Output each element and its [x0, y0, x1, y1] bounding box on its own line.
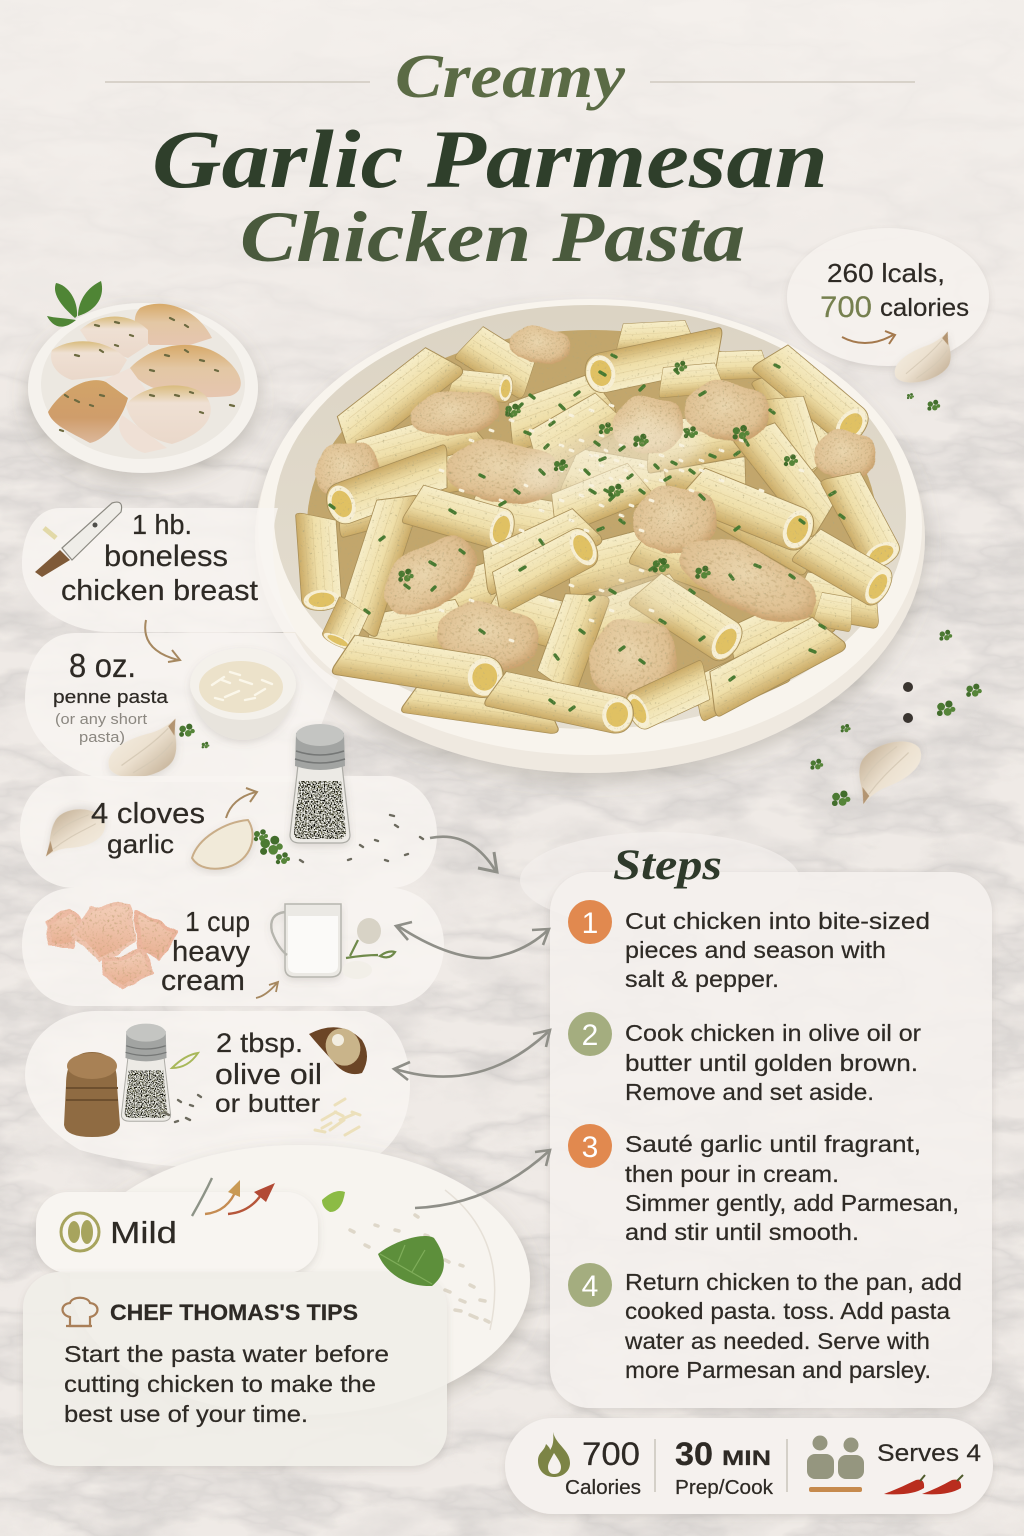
stats bar: Serves 4	[877, 1440, 981, 1467]
pasta and chicken	[295, 320, 904, 736]
stats bar: 30	[675, 1436, 713, 1472]
calorie bubble: 700	[820, 291, 872, 324]
parsley bunch	[254, 829, 290, 864]
icon: garlic and herbs	[342, 918, 395, 979]
bowl	[255, 299, 925, 773]
ingredient: heavy cream: cream	[161, 965, 245, 997]
ingredient: penne pasta: pasta)	[79, 729, 125, 746]
icon: basil	[47, 281, 102, 327]
spice level pill: Mild	[110, 1215, 177, 1250]
ingredient: garlic	[20, 724, 437, 888]
ingredient: penne pasta: (or any short	[55, 711, 148, 728]
ingredient: chicken breast: 1 hb.	[132, 509, 192, 540]
chef tips panel: CHEF THOMAS'S TIPS	[110, 1300, 358, 1325]
ingredient: heavy cream: 1 cup	[185, 906, 250, 937]
step 1: salt & pepper.	[625, 966, 779, 992]
calorie bubble	[787, 228, 989, 386]
ingredient: chicken breast: chicken breast	[61, 575, 258, 607]
step 4: more Parmesan and parsley.	[625, 1357, 931, 1383]
icon: raw chicken	[46, 904, 176, 986]
ingredient: olive oil	[25, 1011, 410, 1169]
icon: spice arrows	[192, 1178, 275, 1216]
ingredient: penne pasta: penne pasta	[53, 687, 169, 707]
chef tips panel	[23, 1272, 447, 1466]
ingredient: olive oil: or butter	[215, 1090, 320, 1118]
step 4: cooked pasta. toss. Add pasta	[625, 1298, 951, 1324]
step 3: Simmer gently, add Parmesan,	[625, 1190, 959, 1216]
calorie bubble: calories	[880, 294, 969, 322]
ingredient: chicken breast	[22, 502, 296, 632]
icon: chef hat	[62, 1298, 98, 1326]
serving plate	[70, 1145, 530, 1415]
icon: chili peppers	[884, 1475, 963, 1494]
stats bar	[505, 1418, 993, 1514]
title: Creamy	[395, 43, 626, 111]
step 4: water as needed. Serve with	[624, 1328, 930, 1354]
icon: wooden shaker	[64, 1052, 120, 1137]
arrow	[256, 982, 278, 998]
arrow	[145, 620, 180, 662]
stats bar: Calories	[565, 1477, 641, 1499]
parmesan sprinkle	[510, 409, 710, 511]
title: Garlic Parmesan	[152, 113, 828, 205]
stats bar: Prep/Cook	[675, 1477, 774, 1499]
title	[105, 43, 915, 277]
scattered garnish	[810, 393, 982, 806]
step 4: 4	[582, 1270, 598, 1303]
title: Chicken Pasta	[240, 197, 745, 277]
ingredient: heavy cream	[22, 888, 444, 1006]
icon: garlic clove	[106, 719, 179, 779]
step 1: pieces and season with	[625, 937, 886, 963]
step 3: 3	[582, 1131, 598, 1164]
stats bar: 700	[582, 1436, 640, 1472]
icon: parmesan bowl	[190, 648, 296, 740]
step 3: and stir until smooth.	[625, 1219, 859, 1245]
ingredient: heavy cream: heavy	[172, 936, 250, 968]
icon: mild	[61, 1213, 99, 1251]
icon: flame	[538, 1432, 570, 1477]
spice level pill	[36, 1178, 318, 1273]
step 1: Cut chicken into bite-sized	[625, 908, 930, 934]
ingredient: olive oil: olive oil	[215, 1059, 322, 1091]
ingredient: penne pasta	[25, 620, 338, 782]
chef tips panel: Start the pasta water before	[64, 1341, 389, 1367]
step 2: Remove and set aside.	[625, 1079, 874, 1105]
main pasta bowl	[255, 299, 925, 773]
icon: people	[807, 1436, 864, 1492]
chef tips panel: best use of your time.	[64, 1401, 308, 1427]
step 4	[568, 1263, 962, 1383]
icon: cream jug	[271, 904, 341, 977]
chef tips panel: cutting chicken to make the	[64, 1371, 376, 1397]
step 4: Return chicken to the pan, add	[625, 1269, 962, 1295]
ingredient: chicken breast: boneless	[104, 540, 228, 573]
step 2: 2	[582, 1019, 598, 1052]
ingredient: penne pasta: 8 oz.	[69, 647, 136, 684]
connector arrows	[394, 837, 550, 1208]
chopped parsley	[330, 355, 844, 710]
ingredient: olive oil: 2 tbsp.	[216, 1028, 303, 1058]
icon: cut garlic	[192, 820, 253, 869]
icon: pepper shaker	[290, 724, 350, 843]
icon: glass shaker	[121, 1024, 171, 1121]
arrow	[226, 788, 257, 818]
chicken plate illustration	[28, 281, 258, 473]
steps panel	[520, 832, 992, 1408]
step 2: Cook chicken in olive oil or	[625, 1020, 921, 1046]
step 3: Sauté garlic until fragrant,	[625, 1131, 921, 1157]
step 3	[568, 1124, 959, 1245]
step 1: 1	[582, 907, 598, 940]
icon: basil leaf	[378, 1236, 444, 1286]
step 1	[568, 900, 930, 992]
step 2	[568, 1012, 921, 1105]
steps heading: Steps	[613, 842, 722, 889]
step 2: butter until golden brown.	[625, 1050, 918, 1076]
stats bar: MIN	[722, 1447, 771, 1470]
spilled parmesan	[350, 1215, 489, 1322]
step 3: then pour in cream.	[625, 1161, 839, 1187]
ingredient: garlic: 4 cloves	[91, 798, 205, 830]
icon: grated cheese	[315, 1099, 360, 1135]
calorie bubble: 260 lcals,	[827, 258, 945, 288]
icon: knife	[35, 502, 122, 577]
icon: lime leaf	[322, 1191, 345, 1212]
icon: spoon of oil	[309, 1023, 367, 1074]
ingredient: garlic: garlic	[107, 829, 174, 859]
